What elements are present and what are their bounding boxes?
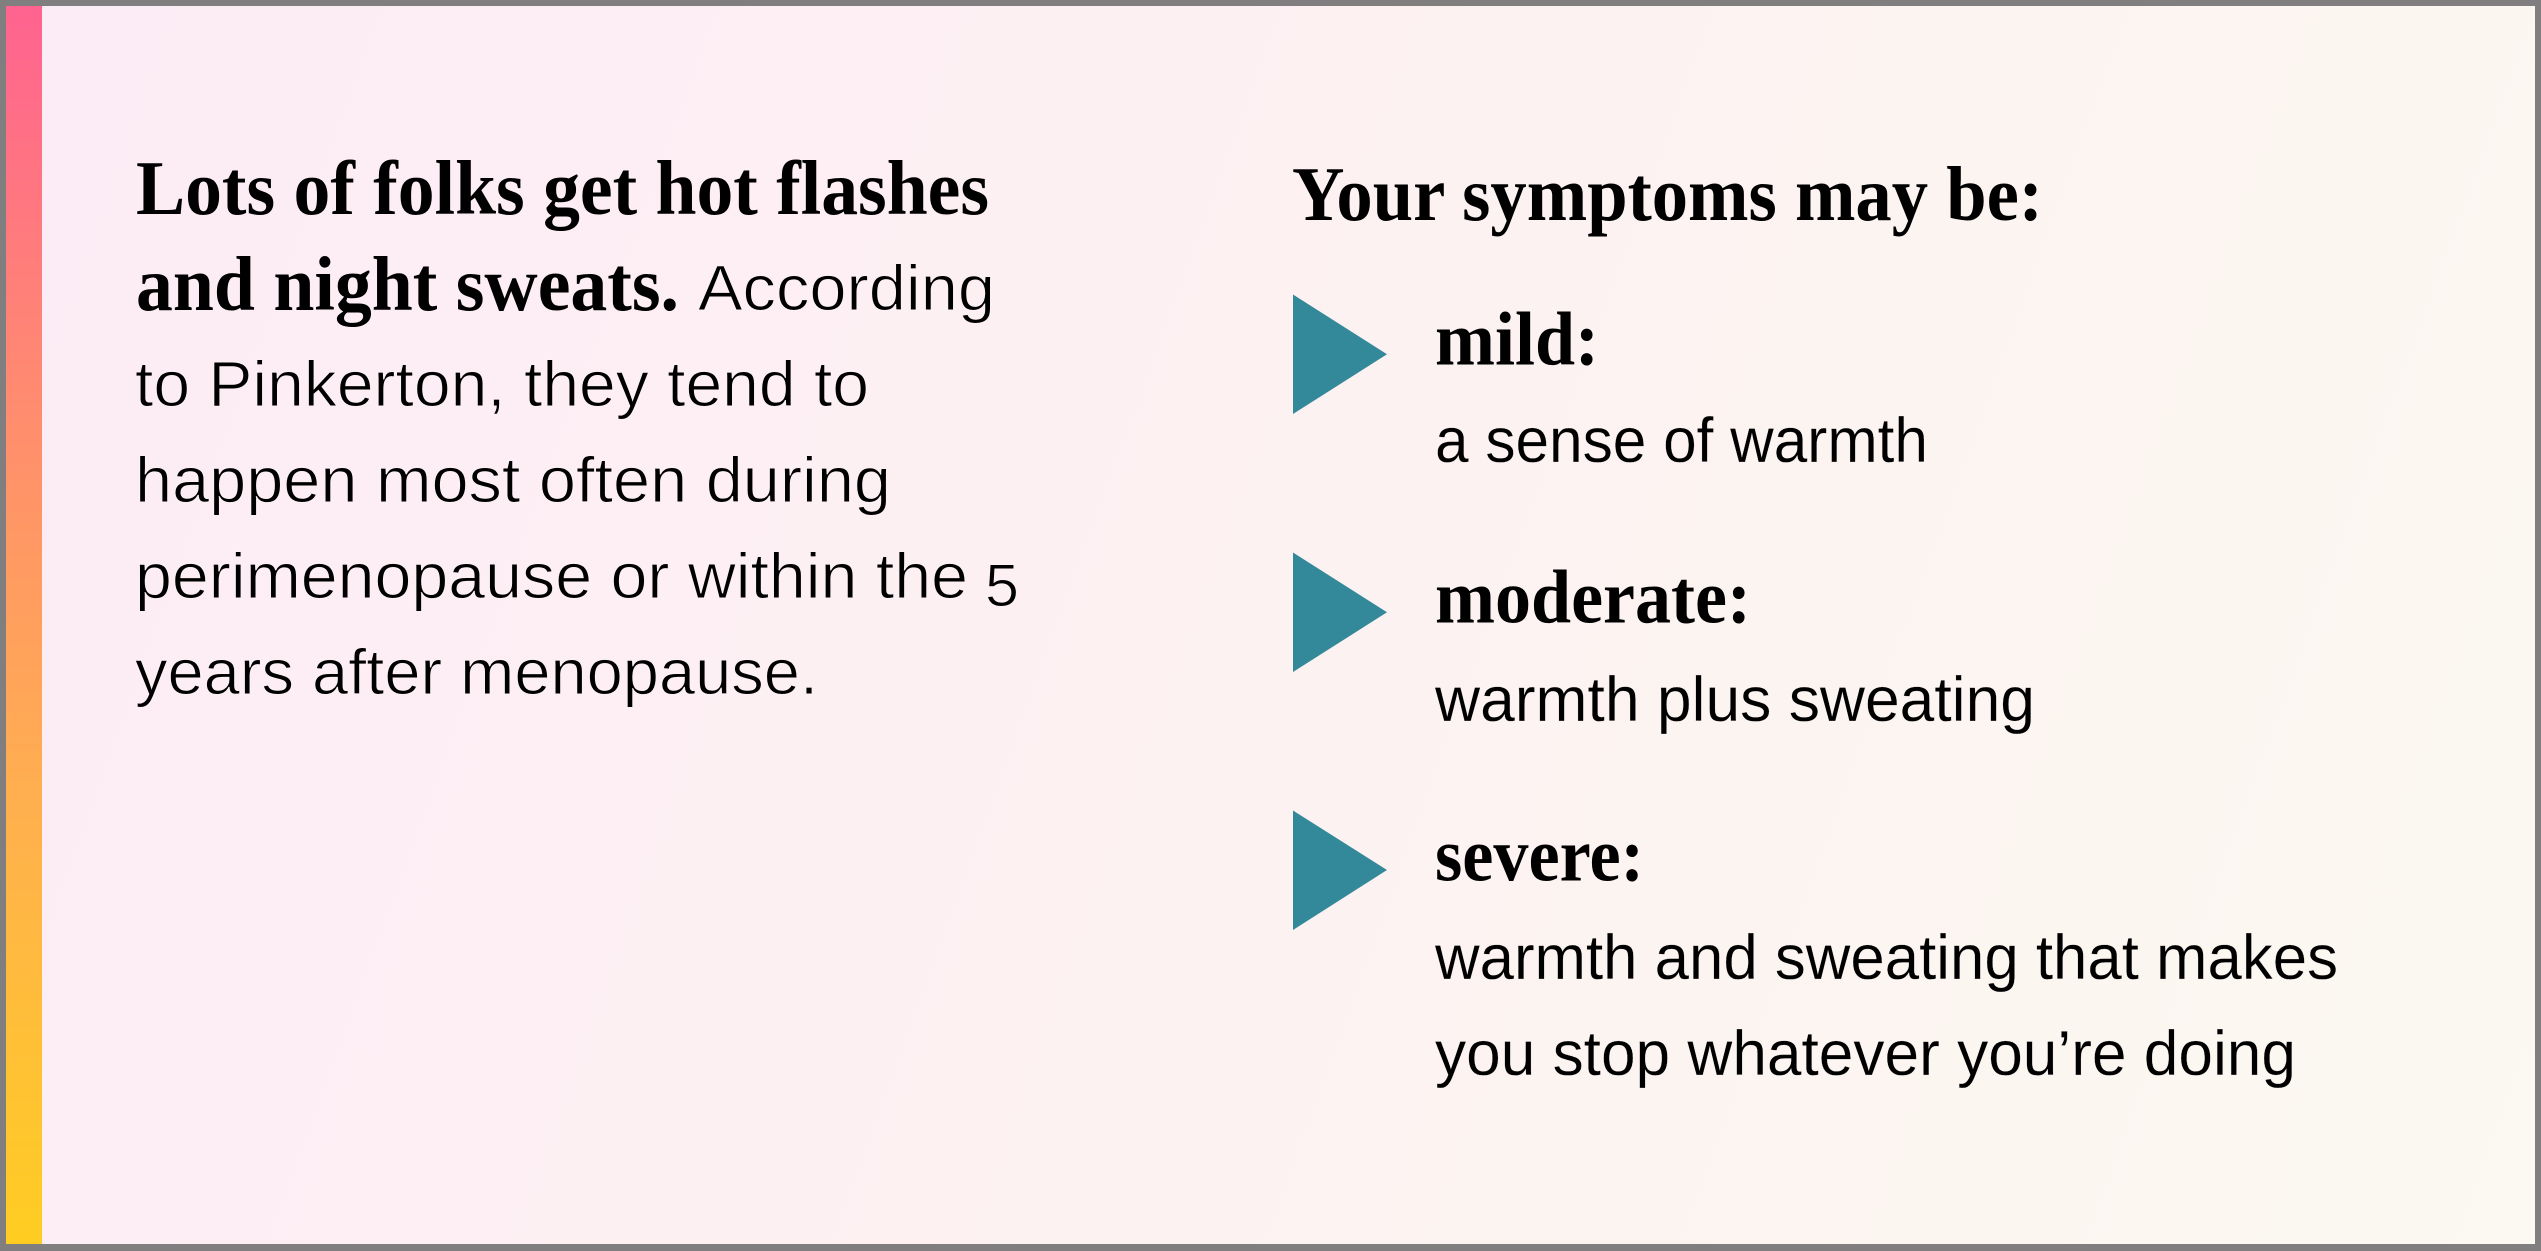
icon: triangle bullet severe — [1293, 810, 1387, 930]
description: severe: you stop whatever you’re doing — [1435, 1019, 2296, 1089]
heading: lots of folks: Lots of folks get hot flashes — [136, 145, 989, 231]
icon: triangle bullet mild — [1293, 294, 1387, 414]
description: moderate: warmth plus sweating — [1434, 665, 2035, 735]
paragraph: according to Pinkerton: According — [698, 252, 995, 324]
paragraph: according to Pinkerton — [135, 252, 1019, 708]
heading: lots of folks: and night sweats. — [136, 241, 679, 327]
list item: mild — [1293, 294, 1928, 476]
description: severe — [1434, 923, 2338, 1089]
label: severe: severe: — [1435, 814, 1644, 898]
heading: your symptoms may be: Your symptoms may be: — [1292, 151, 2043, 237]
icon: triangle bullet moderate — [1293, 552, 1387, 672]
paragraph: according to Pinkerton: happen most often during — [135, 444, 891, 516]
label: mild: mild: — [1435, 298, 1599, 382]
accent bar: pink to yellow gradient — [6, 6, 42, 1244]
paragraph: according to Pinkerton: perimenopause or within the — [135, 540, 968, 612]
list item: severe — [1293, 810, 2338, 1089]
paragraph: according to Pinkerton: to Pinkerton, they tend to — [135, 348, 869, 420]
description: mild: a sense of warmth — [1435, 406, 1928, 476]
list item: moderate — [1293, 552, 2035, 735]
description: severe: warmth and sweating that makes — [1434, 923, 2338, 993]
paragraph: according to Pinkerton: 5 — [985, 552, 1019, 619]
label: moderate: moderate: — [1435, 556, 1751, 640]
text block: hot flashes intro — [135, 145, 1019, 708]
heading: lots of folks — [136, 145, 989, 327]
paragraph: according to Pinkerton: years after menopause. — [135, 636, 818, 708]
